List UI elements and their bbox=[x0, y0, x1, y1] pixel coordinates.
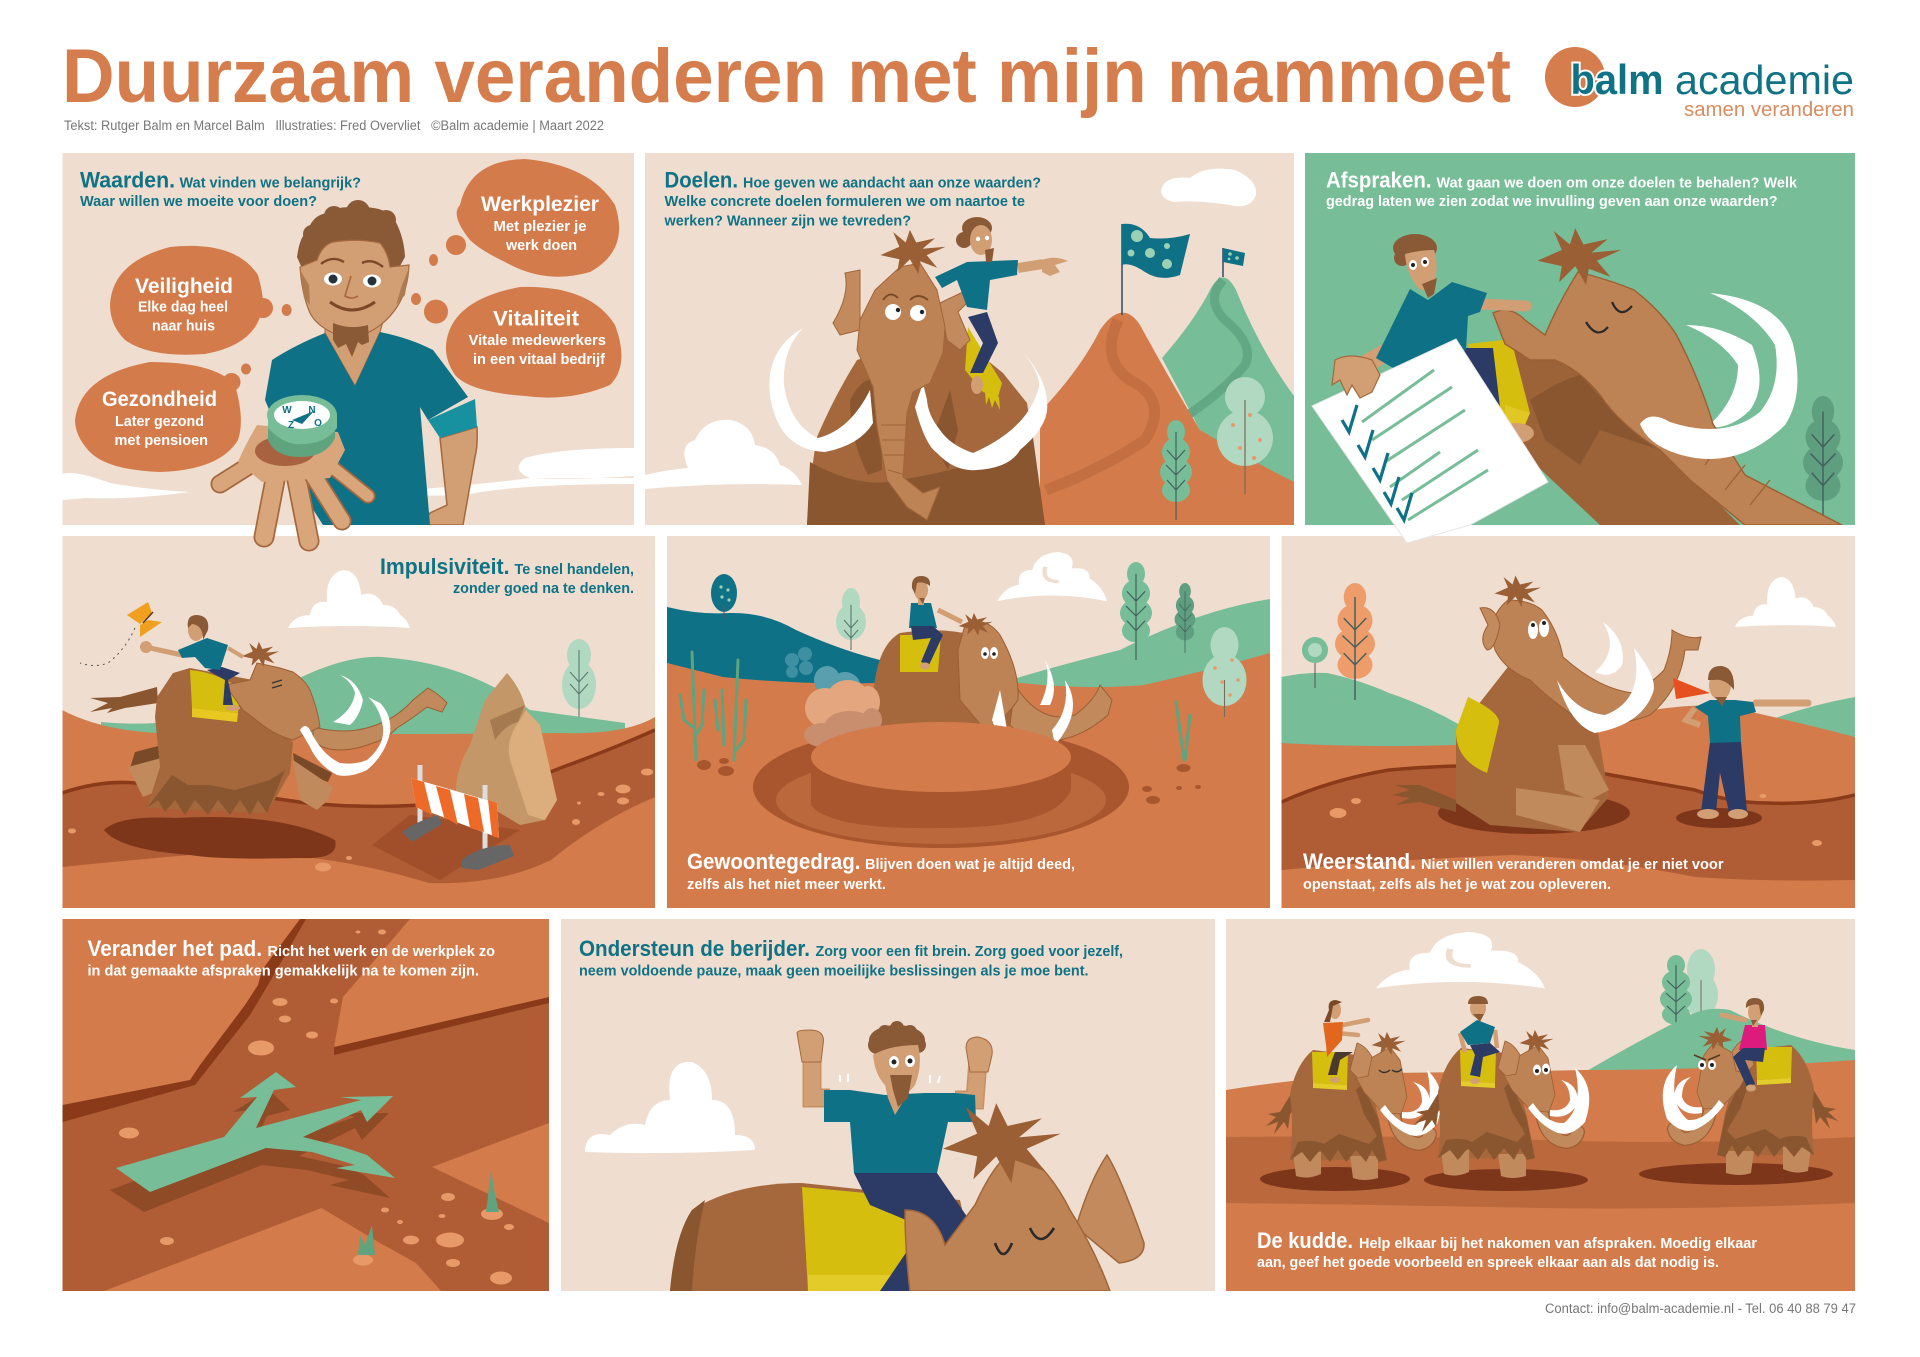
heading: de kudde bbox=[1257, 1228, 1757, 1271]
bubble: Werkplezier: Werkplezier bbox=[481, 193, 599, 216]
heading: afspraken: gedrag laten we zien zodat we invulling geven aan onze waarden? bbox=[1326, 193, 1778, 210]
small trees bbox=[711, 562, 1246, 717]
green hill bbox=[101, 656, 625, 734]
shadows bbox=[104, 815, 520, 880]
cloud bbox=[1376, 932, 1545, 988]
bubble: Veiligheid: naar huis bbox=[152, 318, 215, 334]
clouds bbox=[645, 169, 1256, 489]
logo: balm academie: samen veranderen bbox=[1684, 99, 1854, 121]
heading: afspraken bbox=[1326, 168, 1798, 210]
panel: gewoontegedrag bbox=[667, 536, 1270, 908]
rider pointing bbox=[935, 217, 1068, 394]
roadblock bbox=[402, 765, 514, 870]
heading: waarden bbox=[80, 168, 361, 210]
road edges bbox=[62, 919, 549, 1122]
bubble: Veiligheid: Elke dag heel bbox=[138, 298, 228, 316]
heading: impulsiviteit: zonder goed na te denken. bbox=[453, 580, 634, 597]
rock bbox=[456, 673, 557, 825]
panel: weerstand bbox=[1282, 536, 1855, 908]
bubble: Veiligheid bbox=[110, 246, 292, 355]
cacti bbox=[680, 652, 1190, 760]
ground bbox=[62, 710, 655, 908]
overflow: checklist paper and hand bbox=[1312, 339, 1548, 543]
mammoth body bbox=[670, 1183, 980, 1291]
cloud bbox=[585, 1062, 755, 1153]
shadows bbox=[1260, 1163, 1833, 1191]
pebbles bbox=[1330, 794, 1822, 846]
mammoth leaping bbox=[90, 642, 447, 815]
pit bbox=[753, 740, 1129, 848]
heading: ondersteun bbox=[579, 936, 1123, 980]
icon: butterfly bbox=[127, 602, 162, 637]
heading: impulsiviteit: Impulsiviteit. bbox=[380, 554, 510, 579]
icon: compass: Z bbox=[288, 420, 294, 431]
bubble: Werkplezier: werk doen bbox=[505, 237, 577, 254]
credits line: Tekst: Rutger Balm en Marcel Balm Illustraties: Fred Overvliet ©Balm academie | Maart 2022 bbox=[64, 118, 604, 133]
heading: ondersteun: Ondersteun de berijder. bbox=[579, 936, 810, 961]
heading: verander het pad: in dat gemaakte afspraken gemakkelijk na te komen zijn. bbox=[88, 962, 479, 980]
panel: afspraken bbox=[1305, 153, 1855, 525]
heading: doelen bbox=[664, 168, 1041, 230]
path bbox=[1282, 765, 1855, 881]
pebbles near cacti bbox=[697, 758, 1201, 804]
pebbles bbox=[119, 930, 514, 1284]
green mountain bbox=[1162, 278, 1294, 500]
heading: afspraken: Wat gaan we doen om onze doelen te behalen? Welk bbox=[1436, 174, 1798, 192]
trees bbox=[1160, 377, 1273, 520]
rider two bbox=[1460, 996, 1500, 1084]
panel: ondersteun de berijder bbox=[561, 919, 1215, 1291]
ground bbox=[1282, 705, 1855, 908]
pebbles bbox=[68, 768, 653, 872]
mammoth three bbox=[1663, 1027, 1838, 1175]
bubble: Vitaliteit: in een vitaal bedrijf bbox=[473, 351, 606, 368]
heading: weerstand: openstaat, zelfs als het je wat zou opleveren. bbox=[1303, 876, 1611, 893]
green hill bbox=[1010, 599, 1270, 690]
ground bbox=[667, 653, 1270, 908]
heading: doelen: Doelen. bbox=[664, 168, 738, 192]
heading: gewoontegedrag: zelfs als het niet meer werkt. bbox=[687, 876, 886, 893]
panel: waarden bbox=[62, 153, 634, 525]
cloud bbox=[288, 570, 410, 628]
heading: ondersteun: Zorg voor een fit brein. Zorg goed voor jezelf, bbox=[816, 943, 1123, 960]
bubble: Veiligheid: Veiligheid bbox=[135, 275, 233, 298]
tree bbox=[562, 639, 596, 717]
heading: verander het pad: Richt het werk en de werkplek zo bbox=[268, 943, 495, 960]
bubble: Vitaliteit: Vitale medewerkers bbox=[468, 332, 606, 349]
icon: compass: O bbox=[314, 418, 322, 429]
heading: doelen: Hoe geven we aandacht aan onze waarden? bbox=[743, 174, 1041, 192]
road bbox=[62, 919, 549, 1291]
arrow shadow bbox=[110, 1090, 390, 1212]
man: head bbox=[297, 200, 409, 357]
pit island bbox=[811, 722, 1071, 828]
man on mammoth bbox=[1362, 234, 1526, 372]
mammoth two bbox=[1414, 1030, 1589, 1178]
panel: verander het pad bbox=[62, 919, 549, 1291]
heading: waarden: Waar willen we moeite voor doen? bbox=[80, 193, 317, 210]
heading: afspraken: Afspraken. bbox=[1326, 168, 1432, 192]
bubble: Vitaliteit bbox=[411, 287, 621, 398]
heading: impulsiviteit bbox=[380, 554, 634, 597]
rider blanket bbox=[965, 327, 1002, 410]
logo: balm academie: academie bbox=[1675, 57, 1854, 103]
heading: waarden: Wat vinden we belangrijk? bbox=[180, 174, 361, 192]
bubble: Werkplezier bbox=[429, 159, 619, 277]
cloud bbox=[1735, 577, 1836, 627]
man cheering bbox=[797, 1021, 992, 1291]
bubble: Gezondheid: met pensioen bbox=[114, 432, 208, 449]
mammoth one bbox=[1266, 1032, 1441, 1180]
heading: waarden: Waarden. bbox=[80, 168, 175, 192]
green hill bbox=[1585, 1009, 1855, 1075]
title: Duurzaam veranderen met mijn mammoet bbox=[62, 34, 1511, 119]
rider one: woman bbox=[1323, 1000, 1368, 1083]
logo: balm academie: balm bbox=[1570, 56, 1664, 103]
mammoth behind pit bbox=[872, 613, 1112, 745]
heading: impulsiviteit: Te snel handelen, bbox=[514, 561, 634, 578]
panel: doelen bbox=[645, 153, 1294, 525]
trees bbox=[1302, 583, 1375, 700]
orange mountain bbox=[1040, 313, 1294, 525]
contact line: Contact: info@balm-academie.nl - Tel. 06 40 88 79 47 bbox=[1545, 1301, 1856, 1316]
rider bbox=[909, 576, 962, 670]
heading: weerstand: Weerstand. bbox=[1303, 849, 1416, 874]
teal hill bbox=[667, 607, 880, 690]
heading: de kudde: Help elkaar bij het nakomen van afspraken. Moedig elkaar bbox=[1359, 1235, 1757, 1252]
icon: compass: W bbox=[282, 405, 292, 416]
cloud bbox=[997, 552, 1107, 601]
heading: de kudde: aan, geef het goede voorbeeld en spreek elkaar aan als dat nodig is. bbox=[1257, 1254, 1719, 1271]
ground bbox=[1226, 1060, 1855, 1291]
heading: de kudde: De kudde. bbox=[1257, 1228, 1353, 1253]
man with megaphone bbox=[1673, 666, 1808, 819]
shadows bbox=[1438, 792, 1762, 834]
rider and butterfly bbox=[80, 602, 243, 711]
bubble: Werkplezier: Met plezier je bbox=[494, 218, 586, 235]
arrow: green fork bbox=[116, 1072, 395, 1192]
heading: gewoontegedrag bbox=[687, 849, 1075, 893]
bubble: Vitaliteit: Vitaliteit bbox=[493, 308, 579, 330]
icon: compass: N bbox=[308, 405, 316, 416]
heading: ondersteun: neem voldoende pauze, maak geen moeilijke beslissingen als je moe bent. bbox=[579, 962, 1088, 980]
heading: verander het pad bbox=[88, 936, 495, 980]
man: shirt and arm bbox=[265, 315, 477, 525]
heading: gewoontegedrag: Gewoontegedrag. bbox=[687, 849, 860, 874]
bubble: Gezondheid bbox=[75, 362, 251, 472]
trees bbox=[1660, 949, 1718, 1040]
path bbox=[62, 730, 655, 883]
heading: verander het pad: Verander het pad. bbox=[88, 936, 262, 961]
dust cloud bbox=[804, 666, 882, 747]
mammoth bbox=[769, 230, 1047, 525]
bubble: Gezondheid: Later gezond bbox=[115, 413, 204, 430]
icon: compass bbox=[267, 395, 337, 457]
heading: gewoontegedrag: Blijven doen wat je altijd deed, bbox=[865, 856, 1075, 873]
mammoth head bbox=[905, 1103, 1144, 1291]
overflow: hand with compass bbox=[220, 395, 368, 541]
sitting mammoth bbox=[1392, 576, 1701, 832]
tree bbox=[1803, 396, 1843, 524]
panel: de kudde bbox=[1226, 919, 1855, 1291]
hills bbox=[1282, 673, 1855, 760]
rider three bbox=[1722, 998, 1767, 1092]
logo: balm academie bbox=[1545, 47, 1854, 121]
heading: weerstand bbox=[1303, 849, 1724, 893]
big mammoth bbox=[1459, 228, 1842, 525]
flags bbox=[1122, 224, 1245, 315]
heading: doelen: werken? Wanneer zijn we tevreden? bbox=[664, 212, 911, 230]
heading: weerstand: Niet willen veranderen omdat je er niet voor bbox=[1421, 856, 1724, 873]
heading: doelen: Welke concrete doelen formuleren we om naartoe te bbox=[664, 193, 1025, 210]
bubble: Gezondheid: Gezondheid bbox=[102, 388, 217, 411]
grass tufts bbox=[358, 1170, 499, 1255]
panel: impulsiviteit bbox=[62, 536, 655, 908]
